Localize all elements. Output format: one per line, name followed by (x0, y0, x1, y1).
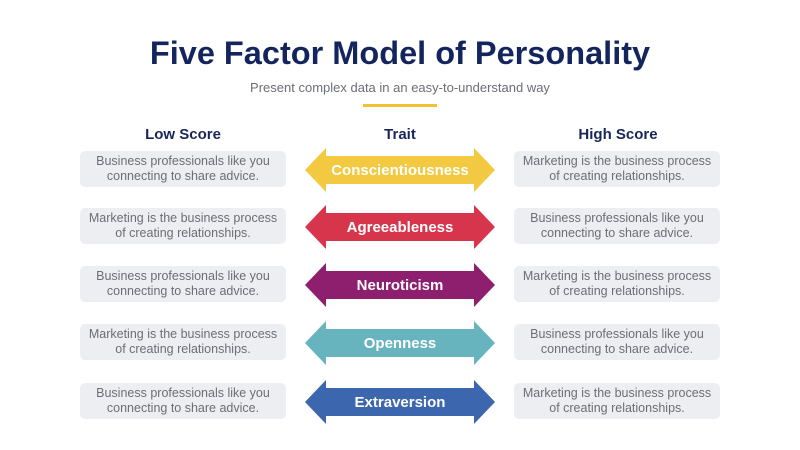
row 4 low: of creating relationships. (115, 342, 251, 356)
heading: low score: Low Score (145, 126, 221, 143)
row 1 high (514, 151, 720, 187)
arrow: extraversion: Extraversion (355, 394, 445, 411)
row 4 high: connecting to share advice. (541, 342, 693, 356)
row 4 high (514, 324, 720, 360)
row 2 low: of creating relationships. (115, 226, 251, 240)
heading: high score: High Score (578, 126, 658, 143)
row 2 low (80, 208, 286, 244)
arrow: neuroticism: Neuroticism (357, 277, 443, 294)
row 2 low: Marketing is the business process (89, 211, 277, 225)
row 3 low: Business professionals like you (96, 269, 270, 283)
row 2 high (514, 208, 720, 244)
arrow: neuroticism (305, 263, 495, 307)
row 3 high: Marketing is the business process (523, 269, 711, 283)
row 1 low: Business professionals like you (96, 154, 270, 168)
arrow: openness: Openness (364, 335, 436, 352)
row 2 high: Business professionals like you (530, 211, 704, 225)
row 5 high: Marketing is the business process (523, 386, 711, 400)
row 3 low (80, 266, 286, 302)
row 1 high: Marketing is the business process (523, 154, 711, 168)
arrow: conscientiousness: Conscientiousness (331, 162, 469, 179)
arrow: openness (305, 321, 495, 365)
row 4 low: Marketing is the business process (89, 327, 277, 341)
row 3 low: connecting to share advice. (107, 284, 259, 298)
row 5 low: Business professionals like you (96, 386, 270, 400)
row 5 low: connecting to share advice. (107, 401, 259, 415)
subtitle: Present complex data in an easy-to-understand way (250, 80, 550, 95)
heading: trait: Trait (384, 126, 416, 143)
row 3 high (514, 266, 720, 302)
row 3 high: of creating relationships. (549, 284, 685, 298)
row 1 high: of creating relationships. (549, 169, 685, 183)
row 5 high (514, 383, 720, 419)
row 5 high: of creating relationships. (549, 401, 685, 415)
row 1 low (80, 151, 286, 187)
arrow: agreeableness: Agreeableness (347, 219, 453, 236)
divider (363, 104, 437, 107)
row 2 high: connecting to share advice. (541, 226, 693, 240)
title: Five Factor Model of Personality (150, 35, 650, 71)
arrow: conscientiousness (305, 148, 495, 192)
row 4 low (80, 324, 286, 360)
row 4 high: Business professionals like you (530, 327, 704, 341)
row 5 low (80, 383, 286, 419)
arrow: extraversion (305, 380, 495, 424)
arrow: agreeableness (305, 205, 495, 249)
row 1 low: connecting to share advice. (107, 169, 259, 183)
